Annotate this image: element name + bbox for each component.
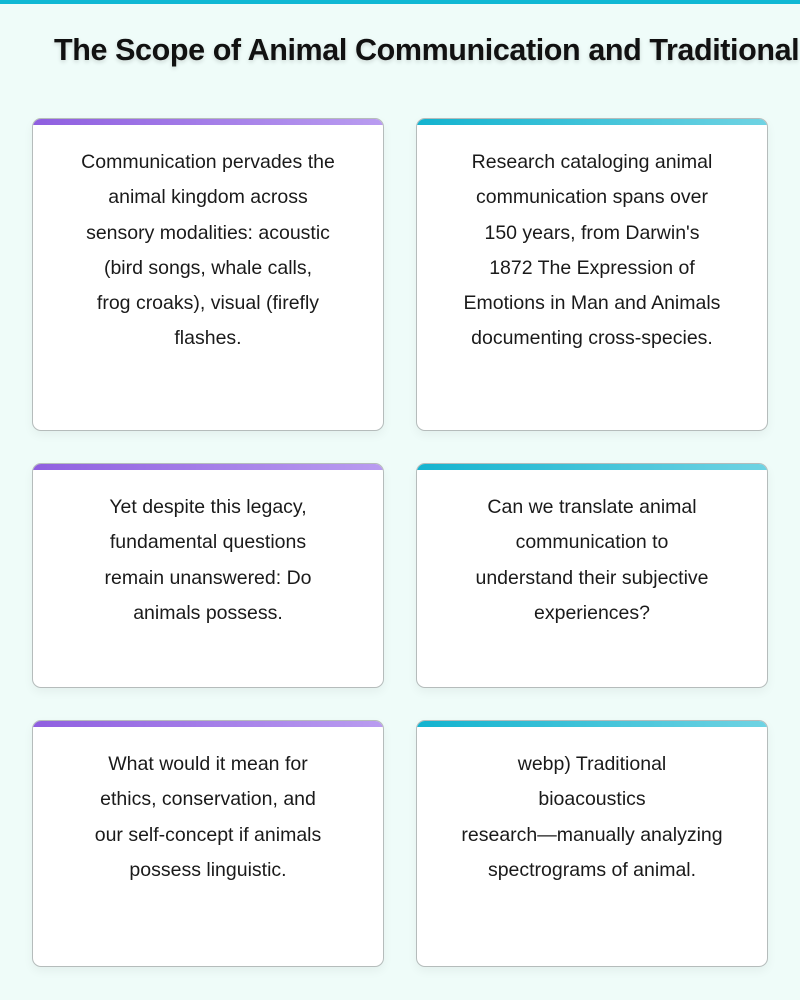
card 2: documenting cross-species. <box>471 327 713 349</box>
card 2: 1872 The Expression of <box>489 257 695 279</box>
card 2: communication spans over <box>476 186 708 208</box>
card 4 <box>416 463 768 688</box>
card 5: possess linguistic. <box>129 859 287 881</box>
card 1 <box>32 118 384 431</box>
card 2: Emotions in Man and Animals <box>464 292 720 314</box>
card 6: spectrograms of animal. <box>488 859 696 881</box>
card 1: sensory modalities: acoustic <box>86 222 330 244</box>
card 1: flashes. <box>174 327 242 349</box>
card 6: bioacoustics <box>538 788 646 810</box>
card 3: animals possess. <box>133 602 283 624</box>
card 3: fundamental questions <box>110 531 306 553</box>
card 1: frog croaks), visual (firefly <box>97 292 319 314</box>
card 6: research—manually analyzing <box>461 824 723 846</box>
card 5 <box>32 720 384 967</box>
card 2: 150 years, from Darwin's <box>484 222 700 244</box>
card 3: remain unanswered: Do <box>104 567 312 589</box>
card 4: experiences? <box>534 602 650 624</box>
card 5: What would it mean for <box>108 753 308 775</box>
card 4: Can we translate animal <box>487 496 697 518</box>
card 6: webp) Traditional <box>518 753 666 775</box>
card 2: Research cataloging animal <box>472 151 712 173</box>
title: The Scope of Animal Communication and Traditional <box>54 33 799 67</box>
card 3: Yet despite this legacy, <box>109 496 307 518</box>
card 4: understand their subjective <box>475 567 709 589</box>
card 6 <box>416 720 768 967</box>
card 2 <box>416 118 768 431</box>
card 1: Communication pervades the <box>81 151 335 173</box>
card 3 <box>32 463 384 688</box>
card 5: our self-concept if animals <box>95 824 321 846</box>
card 1: animal kingdom across <box>108 186 308 208</box>
card 5: ethics, conservation, and <box>100 788 316 810</box>
card 4: communication to <box>516 531 668 553</box>
card 1: (bird songs, whale calls, <box>104 257 312 279</box>
